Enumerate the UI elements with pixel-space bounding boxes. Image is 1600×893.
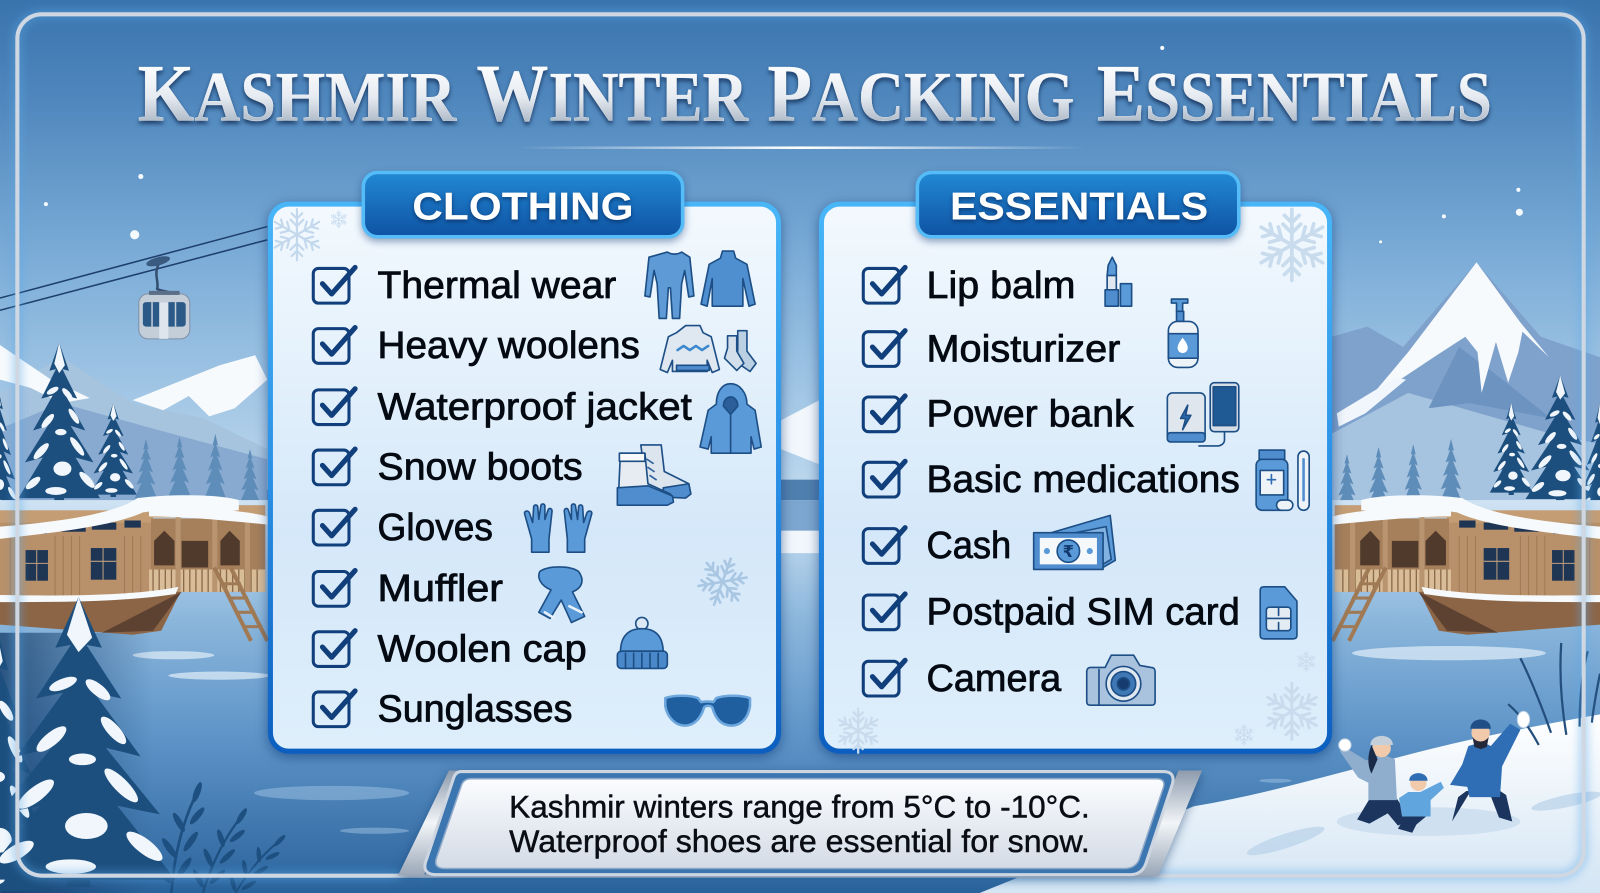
icon: sweater and socks (660, 326, 756, 373)
title divider (515, 146, 1087, 149)
clothing checklist: Woolen cap (378, 627, 587, 669)
frozen lake (0, 500, 1600, 893)
icon: medication and thermometer (1256, 450, 1309, 510)
note text line two: Waterproof shoes are essential for snow. (509, 823, 1090, 859)
icon: lip balm (1105, 257, 1132, 306)
icon: muffler (539, 567, 585, 623)
icon: waterproof jacket (700, 384, 761, 453)
reeds right (1508, 643, 1600, 745)
title: WINTER (477, 47, 749, 138)
father (1450, 711, 1530, 822)
essentials header: ESSENTIALS (950, 185, 1208, 228)
clothing header (363, 172, 683, 237)
gondola (139, 254, 190, 339)
centre snow hill (781, 400, 819, 464)
title: KASHMIR (138, 47, 457, 138)
icon: sunglasses (665, 696, 750, 726)
essentials checklist: Power bank (927, 393, 1134, 435)
family in snow (1337, 711, 1530, 836)
essentials checklist: Cash (927, 524, 1011, 566)
essentials checklist: Lip balm (927, 264, 1076, 306)
essentials checklist: Camera (927, 657, 1061, 699)
icon: thermal set (645, 251, 755, 318)
snowy pines behind houseboats (0, 343, 1600, 515)
icon: gloves (524, 504, 592, 552)
clothing checklist: Thermal wear (378, 264, 616, 306)
note text: Kashmir winters range from 5°C to -10°C. (509, 788, 1090, 824)
left mountains (0, 345, 267, 510)
icon: snow boots (617, 445, 691, 505)
clothing checklist: Waterproof jacket (378, 385, 692, 427)
essentials checklist: Moisturizer (927, 327, 1120, 369)
houseboat left (0, 495, 267, 641)
icon: woolen cap (617, 617, 667, 668)
snow bank (980, 714, 1600, 893)
clothing checklist: Heavy woolens (378, 324, 640, 366)
callout note (398, 771, 1202, 876)
icon: moisturizer bottle (1168, 299, 1198, 367)
snow bank shadows (1245, 788, 1600, 860)
title: PACKING (767, 47, 1074, 138)
icon: cash: ₹ (1063, 542, 1074, 561)
clothing checklist: Gloves (378, 506, 493, 548)
icon: power bank and phone (1167, 383, 1239, 446)
title (138, 47, 1492, 138)
foreground pines (0, 597, 176, 893)
icon: cash (1034, 515, 1115, 569)
essentials header (917, 172, 1239, 237)
essentials checklist: Postpaid SIM card (927, 591, 1240, 633)
tree line (135, 434, 1463, 510)
clothing checklist: Muffler (378, 567, 503, 609)
icon: SIM card (1260, 587, 1297, 639)
houseboat right (1333, 495, 1600, 641)
clothing checklist: Snow boots (378, 446, 583, 488)
child (1398, 773, 1444, 833)
foreground foliage (153, 781, 289, 893)
essentials checklist: Basic medications (927, 458, 1240, 500)
right mountain (1332, 262, 1600, 510)
panel: essentials (821, 172, 1330, 753)
clothing checklist: Sunglasses (378, 688, 572, 730)
sky background (0, 0, 1600, 490)
title: ESSENTIALS (1097, 47, 1492, 138)
cable car wires (0, 227, 267, 310)
essentials checklist (863, 264, 1240, 699)
panel: clothing (270, 172, 779, 751)
clothing checklist (313, 264, 692, 730)
mother (1339, 736, 1410, 826)
icon: camera (1087, 655, 1155, 705)
snow dots (44, 46, 1523, 243)
clothing header: CLOTHING (412, 185, 634, 228)
